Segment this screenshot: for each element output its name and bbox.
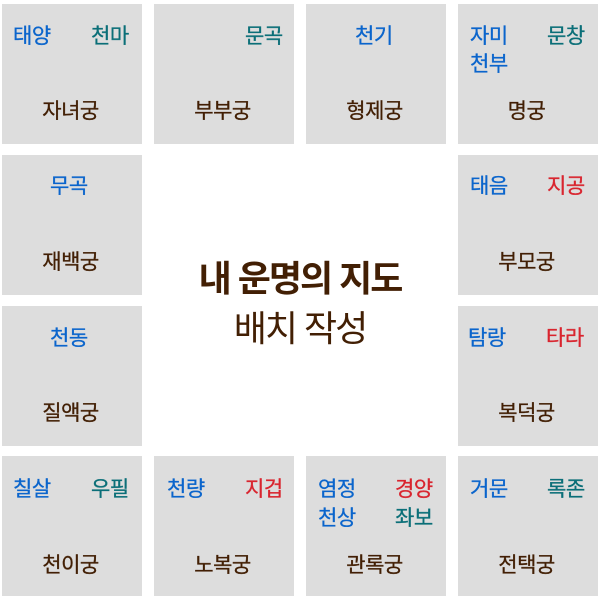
title: 내 운명의 지도: 내 운명의 지도 (199, 258, 401, 299)
panel: 부부궁 (154, 4, 294, 144)
panel: 자녀궁 (2, 4, 142, 144)
star: 타라: 타라 (546, 327, 584, 350)
panel: 부모궁 (458, 155, 598, 295)
star: 염정: 염정 (318, 478, 356, 501)
star: 우필: 우필 (91, 478, 129, 501)
star: 문곡: 문곡 (245, 25, 283, 48)
star: 경양: 경양 (395, 478, 433, 501)
star: 천부: 천부 (470, 53, 508, 76)
panel: 형제궁 (306, 4, 446, 144)
star: 탐랑: 탐랑 (468, 327, 506, 350)
star: 천동: 천동 (50, 327, 88, 350)
panel: 명궁 (458, 4, 598, 144)
panel: 천이궁 (2, 456, 142, 596)
star: 지공: 지공 (547, 175, 585, 198)
palace name: 질액궁: 질액궁 (42, 402, 99, 425)
star: 지겁: 지겁 (245, 478, 283, 501)
star: 좌보: 좌보 (395, 507, 433, 530)
star: 태양: 태양 (13, 25, 51, 48)
palace name: 전택궁: 전택궁 (498, 554, 555, 576)
star: 문창: 문창 (547, 25, 585, 48)
palace name: 재백궁: 재백궁 (42, 251, 99, 274)
star: 칠살: 칠살 (13, 478, 51, 501)
subtitle: 배치 작성: 배치 작성 (234, 308, 366, 349)
star: 천상: 천상 (318, 507, 356, 530)
star: 천량: 천량 (167, 478, 205, 501)
panel: 관록궁 (306, 456, 446, 596)
star: 천마: 천마 (91, 25, 129, 48)
palace name: 관록궁: 관록궁 (346, 554, 403, 576)
palace name: 명궁: 명궁 (508, 100, 545, 123)
star: 거문: 거문 (470, 478, 508, 501)
center title (199, 258, 402, 349)
palace name: 부부궁: 부부궁 (194, 100, 251, 123)
star: 록존: 록존 (547, 478, 585, 501)
star: 태음: 태음 (470, 175, 508, 198)
palace name: 노복궁: 노복궁 (194, 554, 251, 576)
panel: 질액궁 (2, 306, 142, 446)
palace name: 천이궁: 천이궁 (42, 554, 99, 576)
star: 자미: 자미 (470, 25, 508, 48)
palace name: 자녀궁: 자녀궁 (42, 100, 99, 123)
star: 천기: 천기 (355, 25, 393, 48)
panel: 전택궁 (458, 456, 598, 596)
panel: 복덕궁 (458, 306, 598, 446)
palace name: 형제궁: 형제궁 (346, 100, 403, 123)
panel: 재백궁 (2, 155, 142, 295)
panel: 노복궁 (154, 456, 294, 596)
palace name: 부모궁: 부모궁 (498, 251, 555, 274)
star: 무곡: 무곡 (50, 175, 88, 198)
palace name: 복덕궁: 복덕궁 (498, 402, 555, 425)
